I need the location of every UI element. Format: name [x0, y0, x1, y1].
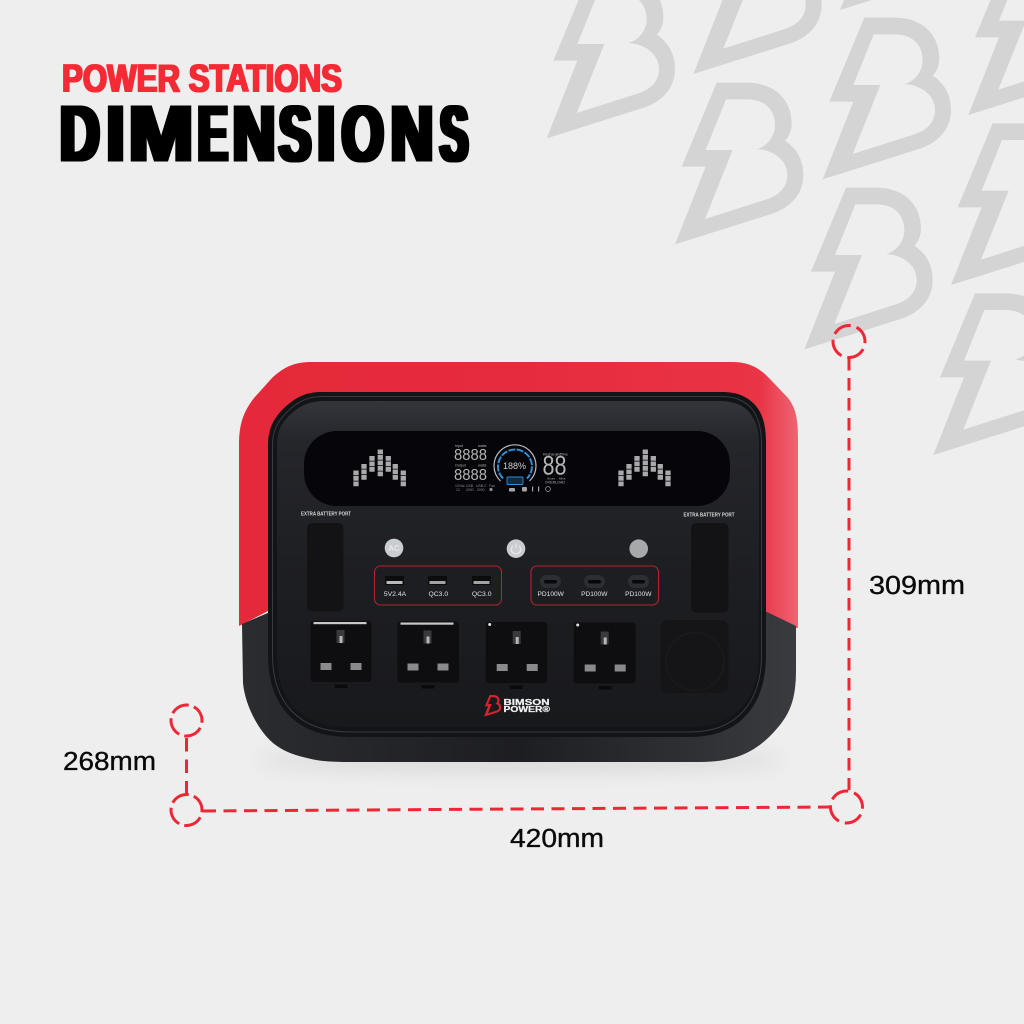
UK socket 1 — [310, 621, 372, 688]
width line — [203, 807, 830, 811]
extra battery port right — [684, 512, 735, 612]
time readout: OVERLOAD — [545, 480, 565, 484]
port status labels: USB — [466, 484, 474, 488]
time readout: Time — [560, 452, 568, 456]
bottom marker — [166, 789, 207, 831]
port status labels: 12 — [456, 488, 460, 492]
port 1: 5V2.4A — [384, 591, 407, 598]
width label: 420mm — [510, 825, 604, 853]
power button — [507, 539, 525, 558]
black lower casing — [242, 612, 796, 762]
UK socket 2 — [398, 622, 459, 688]
group outline — [374, 566, 502, 605]
UK socket 4 — [574, 622, 636, 690]
height line — [848, 358, 850, 790]
port status labels: USB-C — [476, 484, 487, 488]
brand logo — [484, 695, 550, 717]
heading: dimensions: S — [279, 89, 311, 178]
power station product — [239, 362, 798, 762]
LCD display — [304, 431, 730, 506]
label: EXTRA BATTERY PORT — [684, 512, 735, 518]
AC button: AC — [388, 544, 400, 553]
subtitle: power stations: POWER STATIONS — [62, 58, 342, 100]
input readout: 8888 — [454, 447, 487, 464]
heading: dimensions: D — [60, 89, 100, 178]
red upper casing — [239, 362, 798, 628]
battery gauge: 188% — [503, 461, 526, 471]
output readout: watts — [478, 464, 487, 468]
display background — [304, 431, 730, 506]
heading: dimensions: O — [342, 89, 384, 178]
decorative B logo pattern — [547, 0, 1024, 455]
bottom marker — [825, 785, 868, 829]
height label: 309mm — [869, 572, 965, 600]
battery gauge — [494, 445, 536, 484]
time readout: Hours — [547, 476, 556, 480]
extra battery port left — [301, 512, 352, 612]
depth label: 268mm — [63, 748, 156, 776]
port status labels: 0000 — [477, 488, 485, 492]
cover — [691, 523, 728, 612]
output readout: 8888 — [454, 467, 487, 484]
logo wordmark: POWER® — [504, 705, 550, 714]
right level meter — [621, 450, 668, 487]
UK socket 3 — [486, 622, 547, 689]
heading: dimensions: S — [440, 89, 468, 178]
round port cover — [660, 620, 728, 693]
left level meter — [356, 450, 403, 487]
heading: dimensions: N — [233, 89, 275, 178]
input readout: watts — [478, 444, 487, 448]
USB-A ports group — [374, 566, 502, 605]
USB-C ports group — [531, 566, 658, 605]
status icons — [509, 486, 550, 492]
port status labels — [455, 484, 495, 492]
input readout: Input — [455, 444, 463, 448]
heading: dimensions: I — [106, 89, 125, 178]
logo wordmark — [504, 698, 550, 714]
port 3: PD100W — [625, 591, 652, 598]
heading: dimensions: I — [317, 89, 336, 178]
cover — [307, 523, 344, 612]
time readout: 88 — [542, 450, 566, 480]
logo B mark — [484, 695, 501, 717]
device shadow — [255, 750, 785, 770]
output readout: Output — [455, 464, 466, 468]
port status labels: Fan — [489, 484, 495, 488]
port 2: PD100W — [581, 591, 608, 598]
AC button — [385, 539, 403, 557]
heading: dimensions: N — [391, 89, 433, 178]
faceplate panel — [277, 401, 759, 727]
port 3: QC3.0 — [472, 591, 492, 598]
bezel highlight line — [272, 396, 762, 732]
group outline — [531, 566, 658, 605]
width dimension — [203, 807, 830, 853]
top marker — [827, 320, 871, 363]
heading: dimensions: M — [128, 89, 194, 178]
time readout: Mins — [559, 476, 566, 480]
logo wordmark: BIMSON — [504, 698, 550, 707]
port 1: PD100W — [538, 591, 565, 598]
heading: dimensions: E — [198, 89, 227, 178]
port status labels: 0000 — [466, 488, 474, 492]
time readout: Recharging — [543, 452, 561, 456]
title — [60, 58, 468, 178]
height dimension — [825, 320, 965, 829]
port status labels: 12Vdc — [455, 484, 465, 488]
DC button — [629, 539, 648, 558]
faceplate bezel — [268, 392, 766, 737]
depth line — [185, 738, 188, 795]
depth dimension — [63, 700, 207, 831]
port 2: QC3.0 — [428, 591, 448, 598]
label: EXTRA BATTERY PORT — [301, 512, 352, 518]
top marker — [166, 700, 207, 741]
